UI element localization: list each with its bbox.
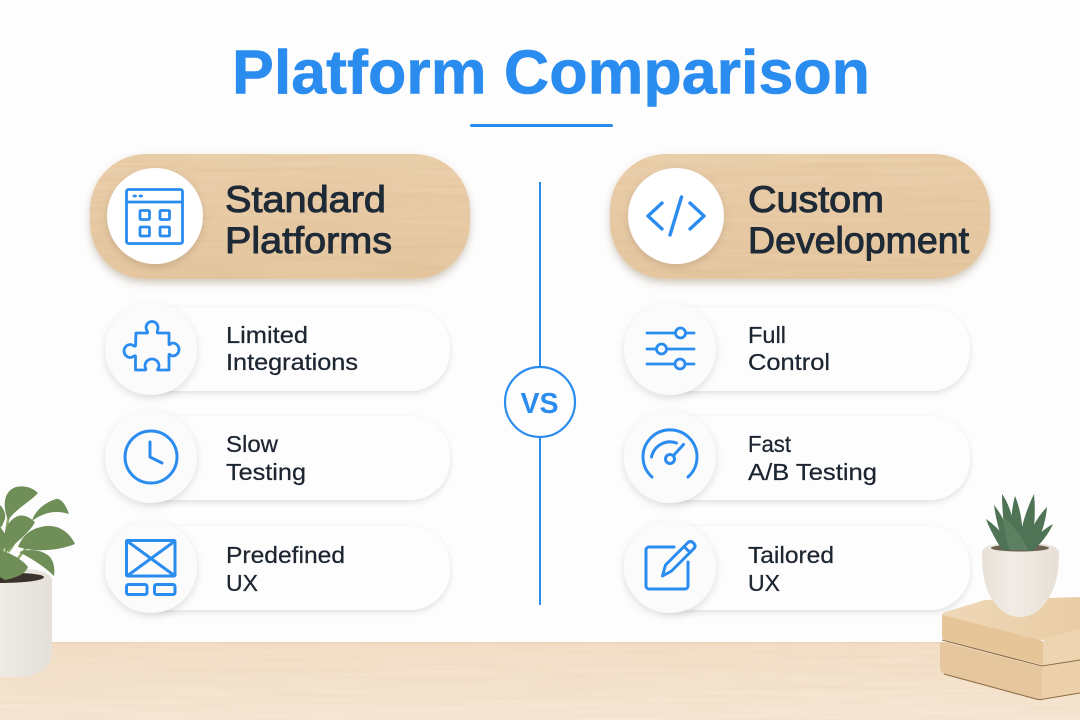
label: full control: Control — [748, 349, 830, 375]
item: limited integrations — [105, 303, 450, 395]
icon: speedometer gauge — [643, 430, 697, 477]
label: limited integrations: Limited — [226, 322, 308, 348]
icon: edit pencil — [646, 542, 695, 589]
icon: wireframe layout — [126, 540, 175, 594]
label: limited integrations: Integrations — [226, 349, 358, 375]
label: predefined ux: UX — [226, 570, 258, 596]
center divider with VS badge — [505, 182, 575, 605]
potted leafy plant — [0, 486, 75, 677]
panel: standard platforms column — [90, 154, 470, 613]
label: fast a/b testing: Fast — [748, 431, 792, 457]
header: custom development — [610, 154, 990, 279]
heading: standard platforms: Standard — [225, 179, 386, 220]
heading: custom development: Custom — [748, 179, 884, 220]
label: tailored ux: Tailored — [748, 542, 834, 568]
item: full control — [624, 303, 970, 395]
item: tailored ux — [624, 521, 970, 613]
label: full control: Full — [748, 322, 786, 348]
heading: standard platforms: Platforms — [225, 220, 392, 261]
center divider with VS badge: VS — [520, 388, 558, 420]
item: predefined ux — [105, 521, 450, 613]
heading: custom development: Development — [748, 220, 970, 261]
title: Platform Comparison — [232, 38, 870, 108]
icon: clock — [125, 431, 177, 483]
item: fast a/b testing — [624, 411, 970, 503]
wooden blocks — [940, 597, 1080, 700]
icon: code brackets — [648, 197, 704, 235]
label: fast a/b testing: A/B Testing — [748, 459, 877, 485]
icon: puzzle piece — [124, 322, 179, 370]
item: slow testing — [105, 411, 450, 503]
label: predefined ux: Predefined — [226, 542, 345, 568]
panel: custom development column — [610, 154, 990, 613]
header: standard platforms — [90, 154, 470, 279]
label: slow testing: Testing — [226, 459, 306, 485]
icon: sliders — [647, 328, 694, 369]
icon: browser window grid — [126, 190, 182, 244]
label: tailored ux: UX — [748, 570, 780, 596]
wooden table — [0, 642, 1080, 720]
label: slow testing: Slow — [226, 431, 278, 457]
title underline — [470, 124, 613, 127]
potted succulent — [982, 494, 1059, 617]
